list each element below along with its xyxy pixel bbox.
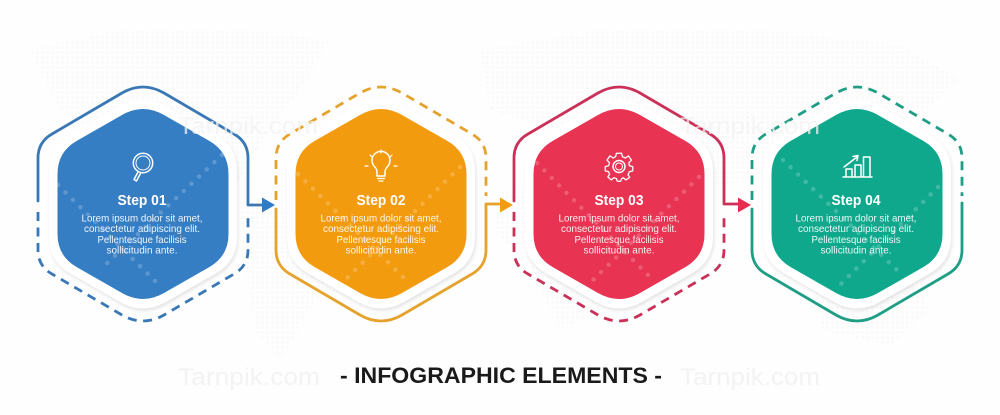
white halo [763, 100, 951, 308]
white halo [49, 100, 237, 308]
body text: Pellentesque facilisis [812, 234, 900, 246]
body text: sollicitudin ante. [346, 244, 416, 256]
body text [796, 212, 916, 256]
watermark dots [537, 163, 699, 281]
watermark: top right: Tarnpik.com [680, 113, 820, 140]
step 03 panel [514, 87, 751, 321]
icon: gear [605, 153, 633, 181]
step 04 panel [752, 87, 962, 321]
outline dashed bottom [38, 212, 248, 321]
world map dots [30, 30, 960, 360]
red hexagon [534, 109, 704, 299]
body text [558, 212, 680, 256]
step 02 panel [276, 87, 513, 321]
outline dashed bottom [514, 212, 724, 321]
icon: magnifier [133, 153, 153, 181]
body text: sollicitudin ante. [584, 244, 654, 256]
body text: consectetur adipiscing elit. [798, 223, 914, 235]
body text: Lorem ipsum dolor sit amet, [320, 212, 442, 224]
arrow head [500, 198, 513, 212]
step label: Step 02 [356, 193, 406, 209]
body text: Lorem ipsum dolor sit amet, [796, 212, 916, 224]
outline solid top with connector [514, 87, 740, 204]
body text: sollicitudin ante. [820, 244, 892, 256]
watermark dots [298, 167, 460, 280]
outline dashed top [752, 87, 962, 200]
white halo [525, 100, 713, 308]
outline solid bottom [752, 203, 962, 321]
body text [320, 212, 442, 256]
white halo [287, 100, 475, 308]
body text: Lorem ipsum dolor sit amet, [82, 212, 202, 224]
icon: light bulb [365, 150, 397, 181]
outline solid top with connector [38, 87, 264, 205]
body text: Lorem ipsum dolor sit amet, [558, 212, 680, 224]
watermark: bottom right: Tarnpik.com [680, 364, 820, 391]
step label: Step 01 [118, 193, 166, 209]
body text: Pellentesque facilisis [574, 234, 664, 246]
watermark dots [783, 160, 938, 287]
arrow head [262, 198, 275, 212]
arrow head [738, 198, 751, 212]
outline solid bottom with connector [276, 204, 502, 321]
title: - INFOGRAPHIC ELEMENTS - [340, 363, 662, 388]
blue hexagon [58, 109, 228, 299]
outline dashed top [276, 87, 486, 200]
body text: consectetur adipiscing elit. [84, 223, 200, 235]
watermark dots [58, 155, 222, 283]
step label: Step 03 [594, 193, 644, 209]
body text [82, 212, 202, 256]
icon: bar chart [843, 156, 872, 177]
step label: Step 04 [832, 193, 880, 209]
body text: consectetur adipiscing elit. [561, 223, 677, 235]
orange hexagon [296, 109, 466, 299]
watermark: bottom left: Tarnpik.com [178, 364, 320, 391]
body text: Pellentesque facilisis [336, 234, 426, 246]
step 01 panel [38, 87, 275, 321]
body text: consectetur adipiscing elit. [323, 223, 439, 235]
body text: sollicitudin ante. [106, 244, 178, 256]
watermark: top left: Tarnpik.com [178, 113, 318, 140]
green hexagon [772, 109, 942, 299]
body text: Pellentesque facilisis [98, 234, 186, 246]
